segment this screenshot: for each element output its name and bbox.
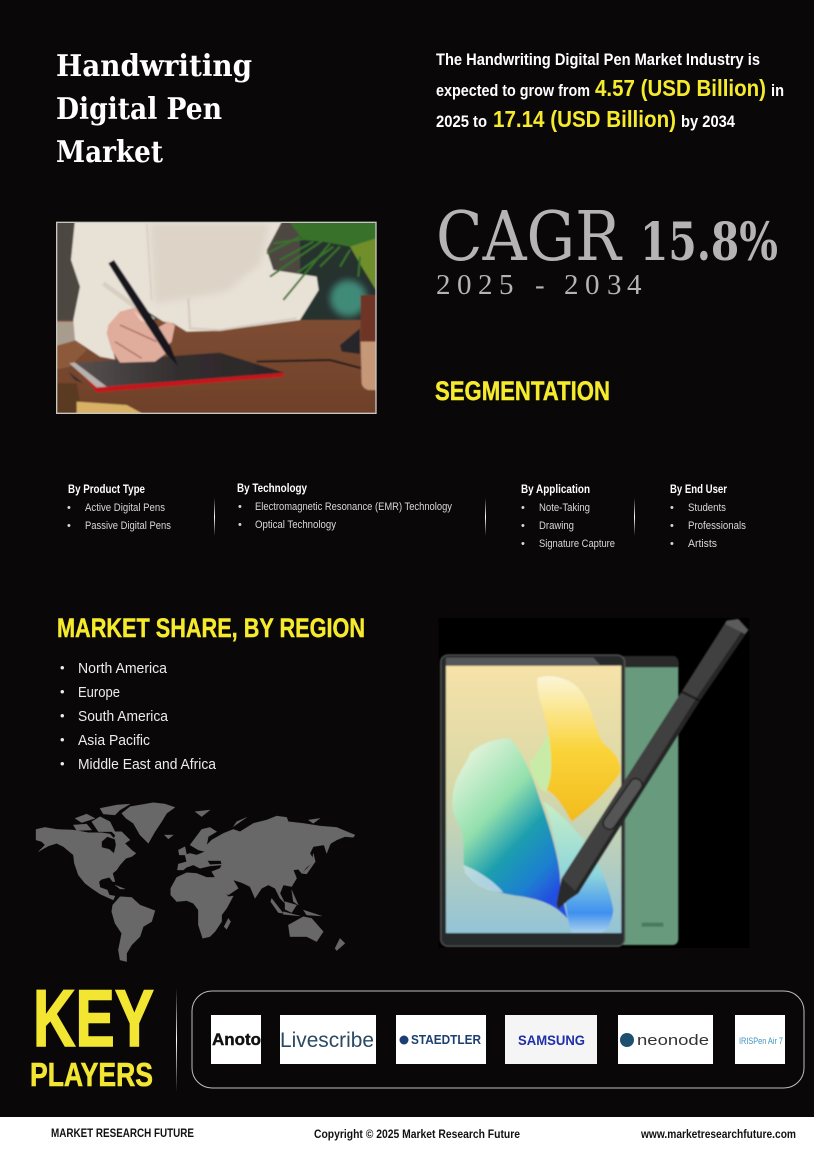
market forecast text: 17.14 (USD Billion) [493, 106, 676, 132]
segmentation: by end user: Professionals [688, 520, 746, 532]
potted plant [267, 222, 377, 390]
segmentation: by technology: Optical Technology [255, 519, 336, 531]
world map [36, 803, 355, 962]
region list: Asia Pacific [78, 732, 150, 749]
segmentation: by product type: Passive Digital Pens [85, 520, 171, 532]
logo: Neonode: neonode [637, 1032, 709, 1049]
logo: Samsung [505, 1015, 597, 1064]
key players heading [30, 974, 154, 1093]
segmentation: by application: By Application [521, 482, 590, 496]
segmentation: by end user: • [670, 538, 674, 550]
market forecast text: 4.57 (USD Billion) [595, 75, 766, 101]
market forecast text: The Handwriting Digital Pen Market Industry is [436, 50, 760, 69]
segmentation: by product type: Active Digital Pens [85, 502, 165, 514]
hand [107, 307, 175, 363]
region list: Middle East and Africa [78, 756, 217, 773]
CAGR value [436, 198, 778, 301]
segmentation: by technology: Electromagnetic Resonance (EMR) Technology [255, 501, 452, 513]
segmentation: by technology [237, 481, 452, 531]
region list: North America [78, 660, 168, 677]
title: Digital Pen [56, 92, 222, 127]
segmentation: by end user: Artists [688, 538, 717, 550]
segmentation: by technology: • [238, 519, 242, 531]
segmentation: by end user: By End User [670, 482, 727, 496]
market forecast text: by 2034 [681, 112, 735, 131]
market forecast text [436, 50, 784, 132]
title: Market [56, 135, 163, 170]
sweater [71, 220, 319, 359]
segmentation: by end user: • [670, 520, 674, 532]
segmentation: by technology: • [238, 501, 242, 513]
logo: IRISPen: IRISPen Air 7 [739, 1036, 783, 1046]
region list: South America [78, 708, 169, 725]
drawing tablet [68, 353, 284, 392]
segmentation: by product type [67, 482, 171, 532]
logo: Staedtler [396, 1015, 486, 1064]
region list: Europe [78, 684, 120, 701]
region list: • [60, 660, 65, 675]
region list: • [60, 756, 65, 771]
segmentation: by application: Signature Capture [539, 538, 615, 550]
segmentation: by application: Drawing [539, 520, 574, 532]
CAGR value: CAGR [436, 198, 623, 277]
photo: hand writing on pen tablet [53, 219, 380, 417]
segmentation: by product type: • [67, 520, 71, 532]
market share heading: MARKET SHARE, BY REGION [57, 613, 365, 643]
CAGR value: 15.8% [640, 212, 778, 273]
logo: IRISPen [735, 1015, 785, 1064]
key players panel [192, 991, 804, 1088]
photo background [53, 219, 380, 417]
segmentation: by application: • [521, 538, 525, 550]
market forecast text: in [771, 81, 784, 100]
logo: Staedtler: STAEDTLER [411, 1033, 481, 1047]
segmentation: by technology: By Technology [237, 481, 307, 495]
title [56, 49, 252, 170]
segmentation: by application [521, 482, 615, 550]
footer: MARKET RESEARCH FUTURE [51, 1126, 194, 1140]
segmentation: by end user: • [670, 502, 674, 514]
region list [60, 660, 217, 773]
CAGR value: 2025 - 2034 [436, 269, 642, 301]
key players heading: KEY [33, 974, 154, 1064]
stylus [108, 260, 178, 366]
logo: Neonode [618, 1015, 713, 1064]
segmentation: by product type: By Product Type [68, 482, 145, 496]
tablet cable [257, 360, 362, 368]
segmentation: by end user [670, 482, 746, 550]
logo: Livescribe: Livescribe [280, 1029, 374, 1052]
logo: Samsung: SAMSUNG [518, 1032, 585, 1048]
logo: Anoto [211, 1015, 261, 1064]
segmentation: by application: • [521, 520, 525, 532]
stylus [557, 619, 748, 909]
footer [0, 1117, 814, 1150]
green back tablet [597, 656, 678, 945]
title: Handwriting [56, 49, 252, 84]
key players heading: PLAYERS [30, 1056, 153, 1093]
segmentation: by product type: • [67, 502, 71, 514]
segmentation: by application: Note-Taking [539, 502, 590, 514]
logo: Anoto: Anoto [212, 1030, 261, 1049]
segmentation: by end user: Students [688, 502, 726, 514]
market forecast text: 2025 to [436, 112, 487, 131]
segmentation heading: SEGMENTATION [435, 376, 610, 406]
segmentation: by application: • [521, 502, 525, 514]
region list: • [60, 732, 65, 747]
footer: Copyright © 2025 Market Research Future [314, 1127, 520, 1141]
wallpaper petals [530, 727, 562, 792]
region list: • [60, 684, 65, 699]
front tablet with wallpaper [441, 655, 625, 946]
logo: Livescribe [280, 1015, 376, 1064]
region list: • [60, 708, 65, 723]
photo: tablet and stylus [439, 618, 749, 948]
market forecast text: expected to grow from [436, 81, 590, 100]
